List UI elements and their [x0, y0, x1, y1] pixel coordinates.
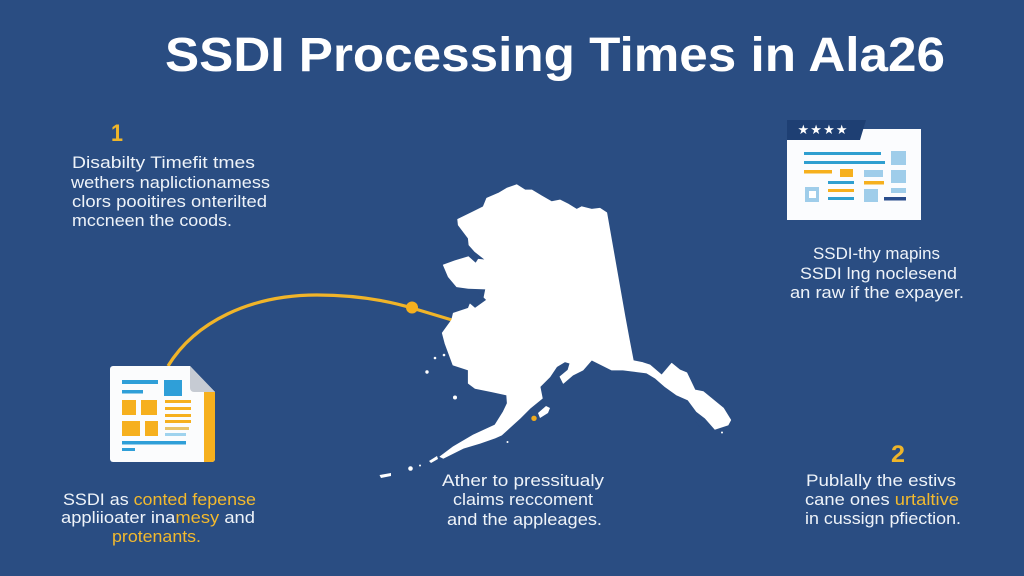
text block: top left: mccneen the coods. — [72, 212, 232, 230]
map: Alaska — [380, 185, 731, 478]
text block: top left — [70, 154, 270, 230]
step number 2: 2 — [891, 441, 905, 468]
connector arrow: curved line from document to map — [168, 295, 452, 366]
text block: bottom left — [61, 491, 256, 546]
text block: bottom center: and the appleages. — [447, 511, 602, 529]
text block: top left: Disabilty Timefit tmes — [72, 154, 255, 172]
text block: bottom left: protenants. — [112, 528, 201, 546]
text block: bottom right: in cussign pfiection. — [805, 510, 961, 528]
icon: document — [110, 366, 215, 462]
text block: top left: wethers naplictionamess — [70, 174, 270, 192]
text block: bottom right: cane ones urtaltive — [805, 491, 959, 509]
text block: bottom right — [805, 472, 961, 528]
text block: top right: SSDI-thy mapins — [813, 245, 940, 263]
text block: top left: clors pooitires onterilted — [72, 193, 267, 211]
text block: bottom center: claims reccoment — [453, 491, 593, 509]
text block: bottom center: Ather to pressitualy — [442, 472, 605, 490]
text block: bottom center — [442, 472, 605, 529]
title: SSDI Processing Times in Ala26 — [165, 29, 945, 82]
icon: web page panel — [787, 120, 921, 220]
text block: bottom left: SSDI as conted fepense — [63, 491, 256, 509]
icon: web page panel: ★★★★ — [798, 122, 848, 137]
text block: top right — [790, 245, 964, 302]
step number 1: 1 — [111, 120, 123, 147]
text block: top right: an raw if the expayer. — [790, 284, 964, 302]
text block: bottom left: appliioater ina mesy and — [61, 509, 255, 527]
text block: bottom right: Publally the estivs — [806, 472, 956, 490]
text block: top right: SSDI lng noclesend — [800, 265, 957, 283]
